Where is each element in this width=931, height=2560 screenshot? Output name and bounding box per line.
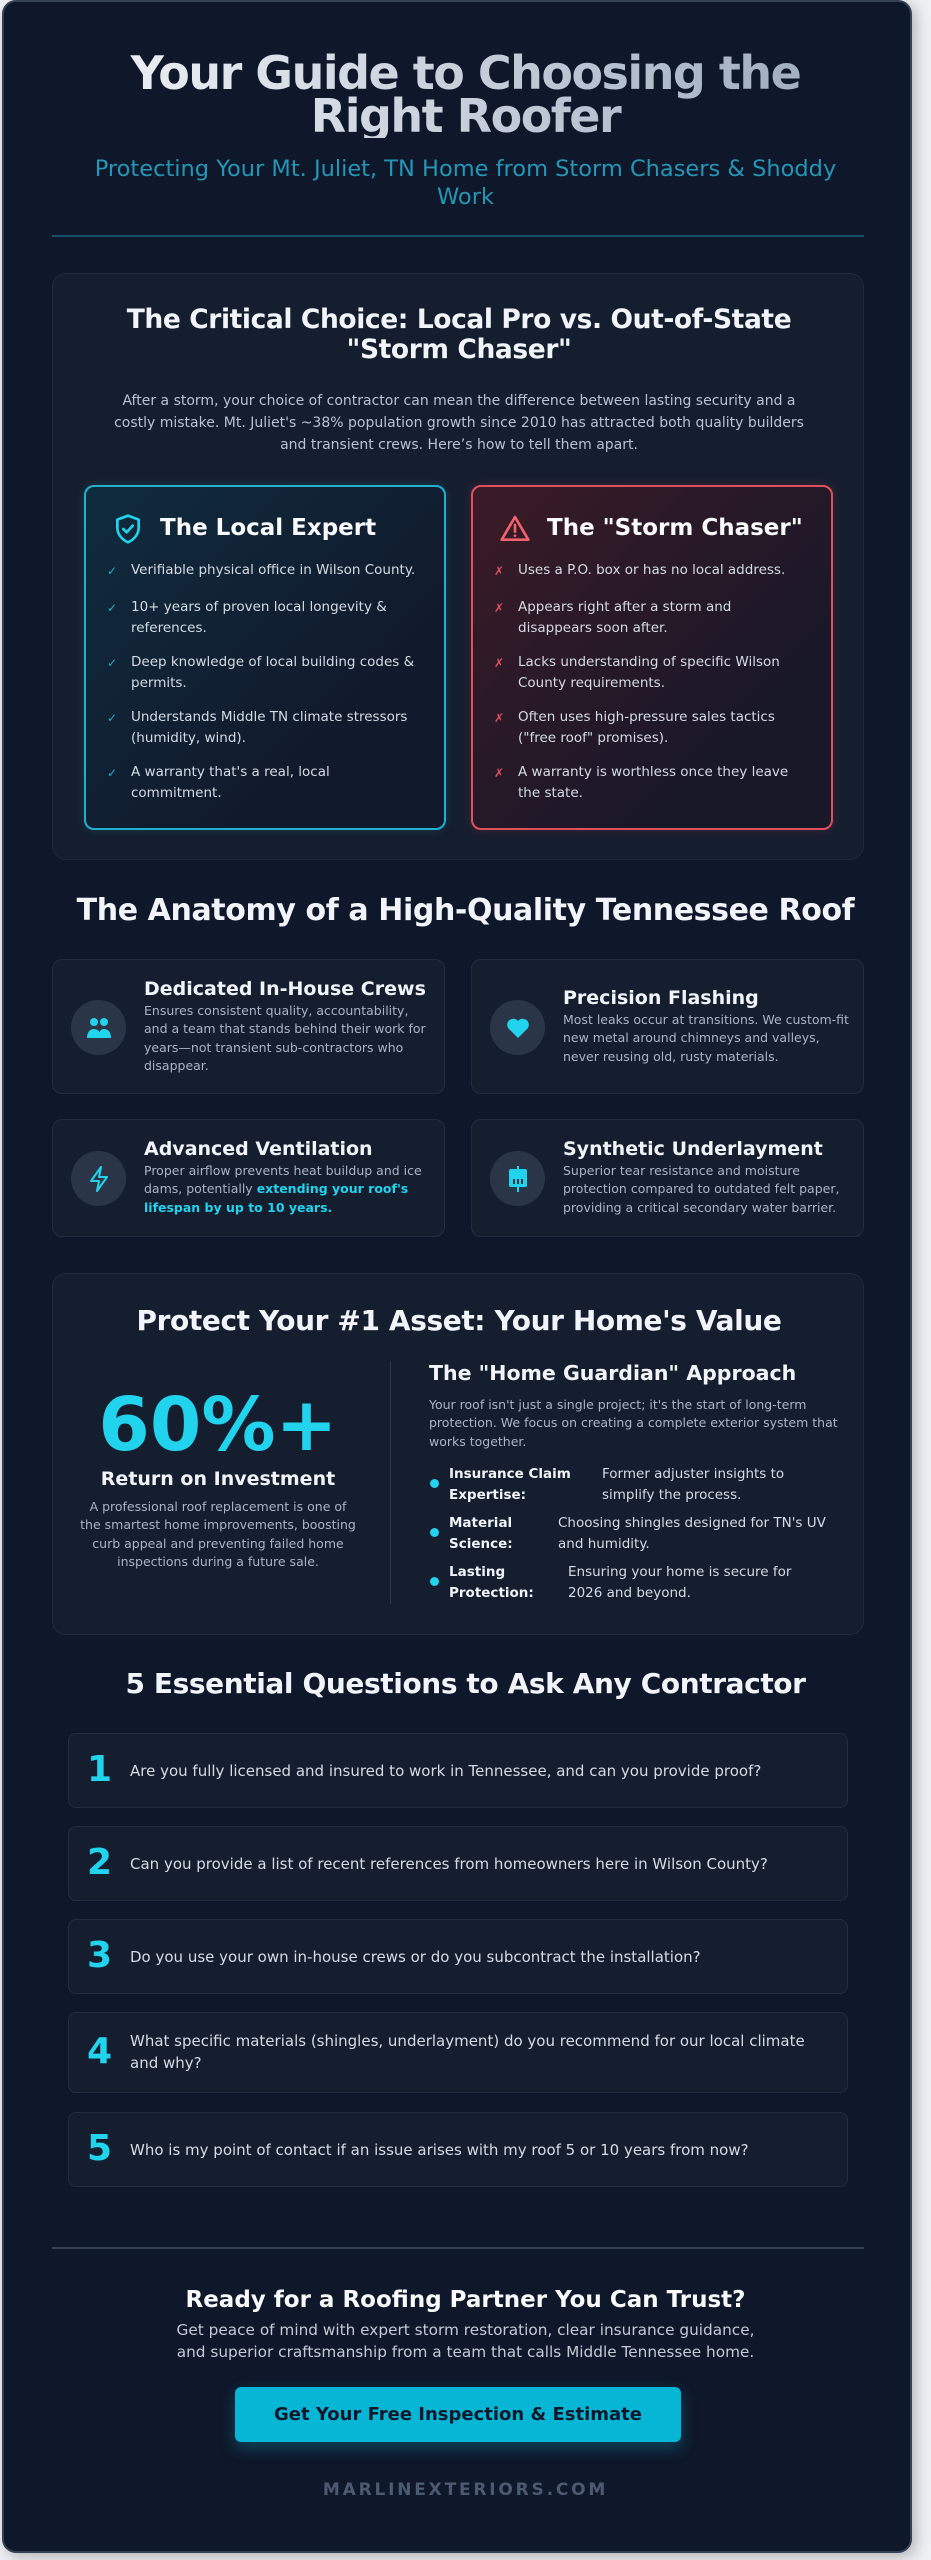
icon: bolt bbox=[71, 1151, 126, 1206]
text: underlayment: Synthetic Underlayment bbox=[563, 1138, 823, 1160]
question 3: Do you use your own in-house crews or do you subcontract the installation? bbox=[130, 1948, 701, 1966]
text: underlayment: Superior tear resistance and moisture bbox=[563, 1163, 800, 1178]
icon: shield check bbox=[116, 514, 140, 544]
card: storm chaser bbox=[471, 485, 833, 830]
checklist: A warranty that's a real, local bbox=[131, 764, 330, 780]
heading: critical choice: "Storm Chaser" bbox=[347, 334, 571, 365]
question 1: 1 bbox=[87, 1749, 112, 1790]
text: ventilation: Proper airflow prevents heat buildup and ice bbox=[144, 1163, 422, 1178]
CTA button bbox=[235, 2387, 681, 2442]
bullet list: Material bbox=[449, 1515, 512, 1531]
title: Right Roofer bbox=[311, 89, 620, 143]
bullet list: Science: bbox=[449, 1536, 513, 1552]
subtitle bbox=[95, 156, 836, 210]
heading: storm chaser: The "Storm Chaser" bbox=[547, 515, 803, 541]
question 3: 3 bbox=[87, 1935, 112, 1976]
bullet list: Insurance Claim bbox=[449, 1466, 571, 1482]
icon: warning bbox=[500, 516, 530, 541]
title bbox=[0, 52, 931, 138]
panel: home value bbox=[52, 1273, 864, 1635]
checklist: Understands Middle TN climate stressors bbox=[131, 709, 407, 725]
x list: ("free roof" promises). bbox=[518, 730, 668, 746]
card: local expert: ✓ bbox=[107, 711, 117, 725]
subtitle: Protecting Your Mt. Juliet, TN Home from Storm Chasers & Shoddy bbox=[95, 156, 836, 182]
bullet list: 2026 and beyond. bbox=[568, 1585, 691, 1601]
intro paragraph: costly mistake. Mt. Juliet's ~38% population growth since 2010 has attracted both quality builders bbox=[114, 415, 804, 431]
text: crews: and a team that stands behind their work for bbox=[144, 1021, 426, 1036]
panel: critical choice bbox=[52, 273, 864, 860]
x list: Often uses high-pressure sales tactics bbox=[518, 709, 775, 725]
bullet list: Lasting bbox=[449, 1564, 505, 1580]
checklist: Deep knowledge of local building codes & bbox=[131, 654, 414, 670]
question 4 bbox=[68, 2012, 848, 2093]
bullet list: Expertise: bbox=[449, 1487, 526, 1503]
x list: Appears right after a storm and bbox=[518, 599, 731, 615]
card: storm chaser: ✗ bbox=[494, 711, 504, 725]
text: crews: disappear. bbox=[144, 1058, 209, 1073]
card: storm chaser: ✗ bbox=[494, 656, 504, 670]
stat: 60%+: A professional roof replacement is one of bbox=[90, 1499, 346, 1514]
question 3 bbox=[68, 1919, 848, 1994]
text: ventilation: dams, potentially extending your roof's bbox=[144, 1181, 408, 1196]
card: local expert bbox=[84, 485, 446, 830]
question 1 bbox=[68, 1733, 848, 1808]
text: underlayment bbox=[563, 1138, 839, 1215]
bullet list: and humidity. bbox=[558, 1536, 650, 1552]
bullet list: Choosing shingles designed for TN's UV bbox=[558, 1515, 826, 1531]
stat: 60%+: inspections during a future sale. bbox=[117, 1554, 319, 1569]
icon: people bbox=[71, 1000, 126, 1055]
text: crews: years—not transient sub-contractors who bbox=[144, 1040, 403, 1055]
checklist: permits. bbox=[131, 675, 187, 691]
question 2: Can you provide a list of recent references from homeowners here in Wilson County? bbox=[130, 1855, 768, 1873]
text: underlayment: protection compared to outdated felt paper, bbox=[563, 1181, 839, 1196]
text: flashing: never reusing old, rusty materials. bbox=[563, 1049, 779, 1064]
checklist: (humidity, wind). bbox=[131, 730, 246, 746]
CTA text: Get peace of mind with expert storm restoration, clear insurance guidance, bbox=[177, 2321, 754, 2339]
checklist: references. bbox=[131, 620, 207, 636]
home guardian approach: Your roof isn't just a single project; it's the start of long-term bbox=[429, 1397, 806, 1412]
bullet list: Former adjuster insights to bbox=[602, 1466, 784, 1482]
question 4: 4 bbox=[87, 2031, 112, 2072]
text: flashing bbox=[563, 987, 849, 1064]
question 1: Are you fully licensed and insured to work in Tennessee, and can you provide proof? bbox=[130, 1762, 761, 1780]
text: ventilation: Advanced Ventilation bbox=[144, 1138, 373, 1160]
heading: local expert: The Local Expert bbox=[160, 515, 376, 541]
intro paragraph: and transient crews. Here’s how to tell them apart. bbox=[280, 437, 638, 453]
text: crews bbox=[144, 978, 426, 1073]
bullet list: Ensuring your home is secure for bbox=[568, 1564, 791, 1580]
intro paragraph: After a storm, your choice of contractor can mean the difference between lasting security and a bbox=[122, 393, 796, 409]
footer brand: MARLINEXTERIORS.COM bbox=[323, 2480, 608, 2500]
stat: 60%+: curb appeal and preventing failed home bbox=[92, 1536, 344, 1551]
card: local expert: ✓ bbox=[107, 656, 117, 670]
question 4: and why? bbox=[130, 2054, 202, 2072]
bullet list: simplify the process. bbox=[602, 1487, 741, 1503]
heading: home value: Protect Your #1 Asset: Your Home's Value bbox=[137, 1304, 781, 1337]
icon: layer bbox=[490, 1151, 545, 1206]
card: local expert: ✓ bbox=[107, 564, 117, 578]
text: crews: Dedicated In-House Crews bbox=[144, 978, 426, 1000]
checklist: Verifiable physical office in Wilson County. bbox=[131, 562, 415, 578]
feature: ventilation bbox=[52, 1119, 445, 1237]
text: ventilation bbox=[144, 1138, 422, 1215]
text: flashing: new metal around chimneys and valleys, bbox=[563, 1030, 820, 1045]
subtitle: Work bbox=[437, 184, 494, 210]
card: storm chaser: ✗ bbox=[494, 766, 504, 780]
CTA button: Get Your Free Inspection & Estimate bbox=[274, 2404, 642, 2425]
text: ventilation: lifespan by up to 10 years. bbox=[144, 1200, 332, 1215]
x list: Uses a P.O. box or has no local address. bbox=[518, 562, 785, 578]
x list: Lacks understanding of specific Wilson bbox=[518, 654, 780, 670]
heading: critical choice: The Critical Choice: Local Pro vs. Out-of-State bbox=[127, 304, 791, 335]
home guardian approach: works together. bbox=[429, 1434, 526, 1449]
home guardian approach bbox=[429, 1361, 838, 1601]
feature: underlayment bbox=[471, 1119, 864, 1237]
heading: anatomy: The Anatomy of a High-Quality Tennessee Roof bbox=[77, 893, 854, 928]
x list bbox=[494, 562, 788, 801]
title: Your Guide to Choosing the bbox=[131, 46, 800, 100]
card: local expert: ✓ bbox=[107, 601, 117, 615]
stat: 60%+: 60%+ bbox=[98, 1382, 338, 1468]
heading: questions: 5 Essential Questions to Ask Any Contractor bbox=[125, 1667, 806, 1700]
question 5 bbox=[68, 2112, 848, 2187]
CTA heading: Ready for a Roofing Partner You Can Trust? bbox=[185, 2287, 746, 2313]
text: flashing: Most leaks occur at transitions. We custom-fit bbox=[563, 1012, 849, 1027]
checklist bbox=[107, 562, 415, 801]
home guardian approach: protection. We focus on creating a complete exterior system that bbox=[429, 1415, 838, 1430]
card: storm chaser: ✗ bbox=[494, 564, 504, 578]
question 2: 2 bbox=[87, 1842, 112, 1883]
question 5: Who is my point of contact if an issue arises with my roof 5 or 10 years from now? bbox=[130, 2141, 749, 2159]
x list: County requirements. bbox=[518, 675, 665, 691]
stat: 60%+ bbox=[80, 1382, 356, 1569]
heading: critical choice bbox=[126, 304, 791, 365]
x list: disappears soon after. bbox=[518, 620, 668, 636]
x list: the state. bbox=[518, 785, 583, 801]
card: local expert: ✓ bbox=[107, 766, 117, 780]
question 5: 5 bbox=[87, 2128, 112, 2169]
text: crews: Ensures consistent quality, accountability, bbox=[144, 1003, 408, 1018]
stat: 60%+: Return on Investment bbox=[101, 1468, 335, 1490]
feature: crews bbox=[52, 959, 445, 1094]
feature: flashing bbox=[471, 959, 864, 1094]
stat: 60%+: the smartest home improvements, boosting bbox=[80, 1517, 356, 1532]
question 4: What specific materials (shingles, underlayment) do you recommend for our local climate bbox=[130, 2032, 805, 2050]
checklist: commitment. bbox=[131, 785, 222, 801]
x list: A warranty is worthless once they leave bbox=[518, 764, 788, 780]
bullet list bbox=[430, 1466, 826, 1601]
bullet list: Protection: bbox=[449, 1585, 534, 1601]
text: underlayment: providing a critical secondary water barrier. bbox=[563, 1200, 836, 1215]
CTA text bbox=[177, 2321, 754, 2361]
card: storm chaser: ✗ bbox=[494, 601, 504, 615]
icon: heart bbox=[490, 1000, 545, 1055]
checklist: 10+ years of proven local longevity & bbox=[131, 599, 387, 615]
intro paragraph bbox=[114, 393, 804, 453]
question 2 bbox=[68, 1826, 848, 1901]
home guardian approach: The "Home Guardian" Approach bbox=[429, 1361, 796, 1385]
CTA text: and superior craftsmanship from a team that calls Middle Tennessee home. bbox=[177, 2343, 754, 2361]
text: flashing: Precision Flashing bbox=[563, 987, 759, 1009]
